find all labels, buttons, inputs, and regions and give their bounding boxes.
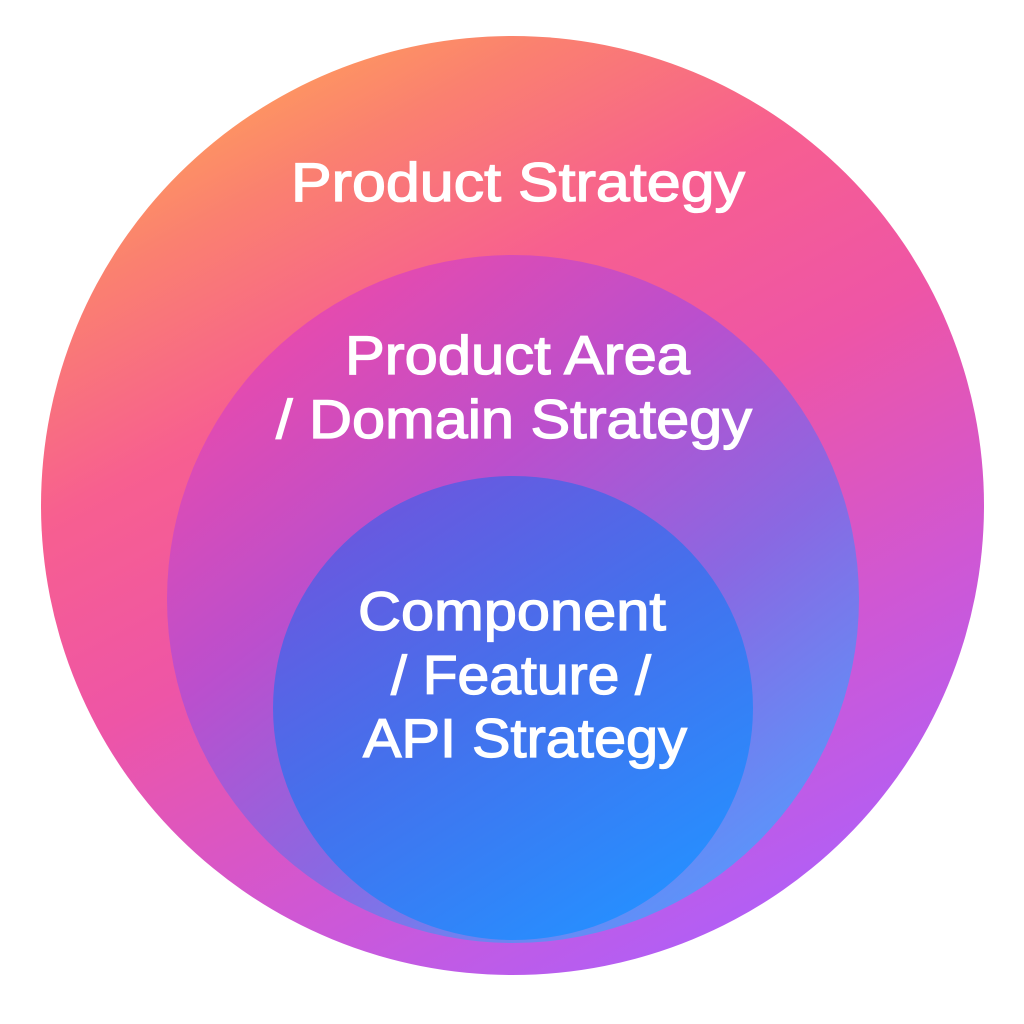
heading: component / feature / API strategy: Component — [358, 580, 666, 642]
heading: product area / domain strategy — [276, 324, 753, 450]
heading: component / feature / API strategy: / Feature / — [391, 644, 652, 706]
panel: component / feature / API strategy — [273, 476, 753, 940]
heading: product strategy: Product Strategy — [291, 151, 746, 213]
heading: product area / domain strategy: Product Area — [345, 324, 690, 386]
panel: product area / domain strategy — [167, 255, 859, 943]
heading: component / feature / API strategy: API Strategy — [363, 707, 688, 769]
heading: component / feature / API strategy — [358, 580, 688, 769]
heading: product area / domain strategy: / Domain Strategy — [276, 388, 753, 450]
